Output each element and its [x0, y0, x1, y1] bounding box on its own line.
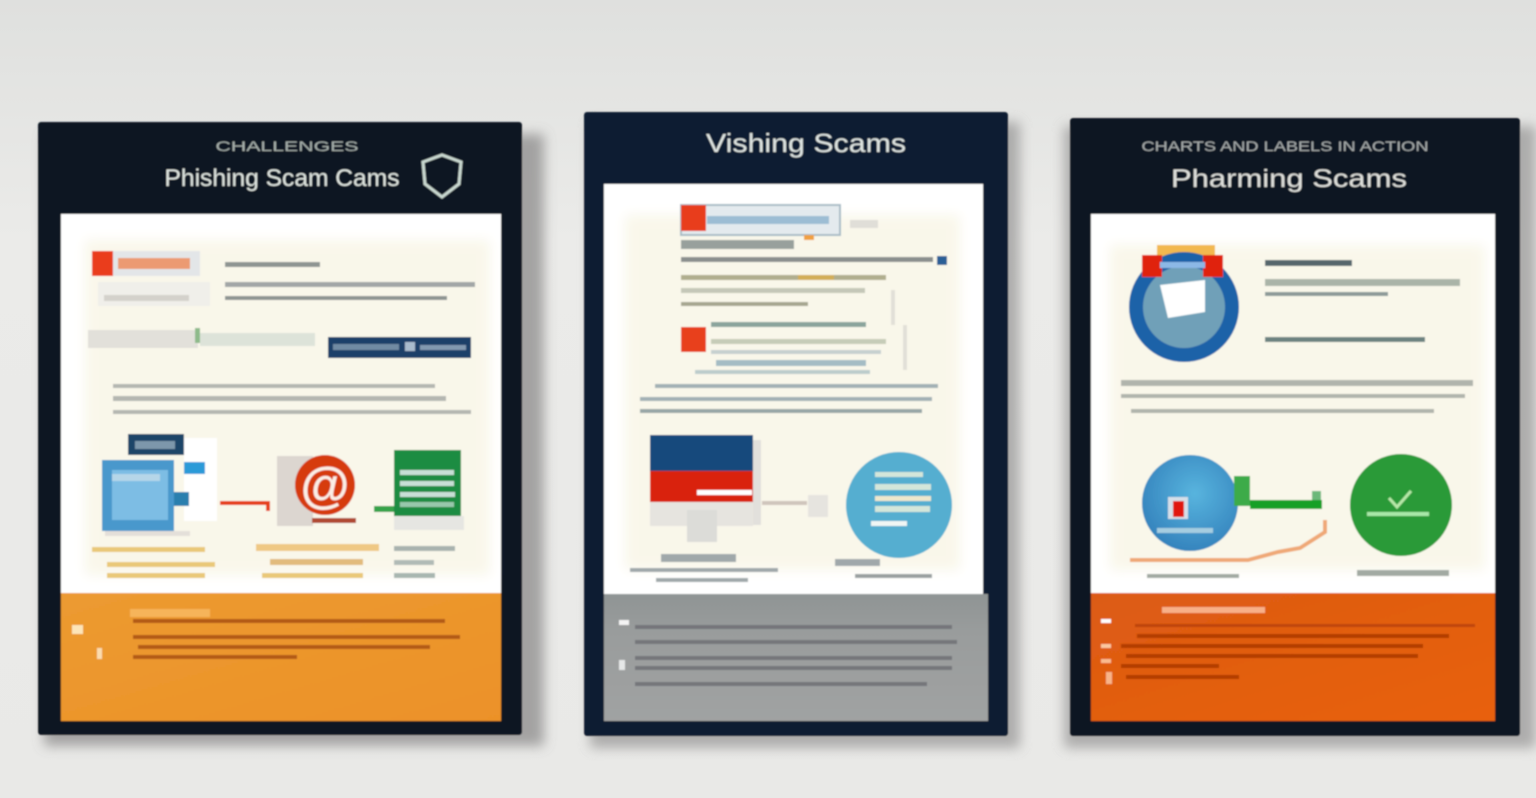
icon: at sign mail: @ [301, 457, 349, 513]
text lines [1265, 260, 1460, 342]
button [328, 337, 471, 358]
paragraph [640, 384, 938, 413]
captions [630, 554, 932, 582]
poster 3 header: Pharming Scams [1171, 165, 1407, 193]
link row [88, 328, 315, 348]
poster 1 content panel [61, 214, 501, 594]
poster 2 content panel [604, 184, 983, 594]
captions [1147, 570, 1449, 578]
icon: monitor warning [650, 435, 761, 542]
captions [92, 544, 455, 578]
paragraph [1121, 380, 1473, 413]
poster 1 header [164, 138, 400, 192]
arrow: orange [1130, 520, 1325, 560]
poster 3 header [1142, 138, 1428, 193]
icon: green list [374, 450, 464, 530]
arrow [762, 495, 828, 517]
poster 2 title: Vishing Scams [706, 128, 906, 158]
callout: grey tips [604, 594, 988, 721]
icon: blue document [102, 434, 217, 536]
icon: blue circle [1142, 455, 1238, 551]
alert heading one [681, 205, 878, 240]
panel: poster 1 [38, 122, 544, 746]
poster 3 header: CHARTS AND LABELS IN ACTION [1142, 138, 1428, 154]
arrow: green [1234, 476, 1322, 509]
text lines [225, 262, 475, 300]
arrow [220, 503, 268, 511]
icon: green check circle [1350, 454, 1452, 556]
icon: blue globe alert [1129, 245, 1239, 362]
poster 3 content panel [1091, 214, 1495, 594]
icon: at sign mail [277, 455, 356, 526]
poster 1 header: Phishing Scam Cams [164, 165, 400, 192]
panel: poster 2 [584, 112, 1020, 748]
alert heading two [681, 290, 905, 374]
alert heading [92, 251, 210, 306]
poster 1 header: CHALLENGES [216, 138, 358, 154]
callout: orange tips [1091, 593, 1495, 721]
callout: orange tips [61, 593, 501, 721]
paragraph [113, 384, 471, 414]
text block one [681, 240, 947, 306]
panel: poster 3 [1064, 118, 1536, 748]
icon: teal list circle [846, 452, 952, 558]
icon: shield [423, 155, 461, 197]
